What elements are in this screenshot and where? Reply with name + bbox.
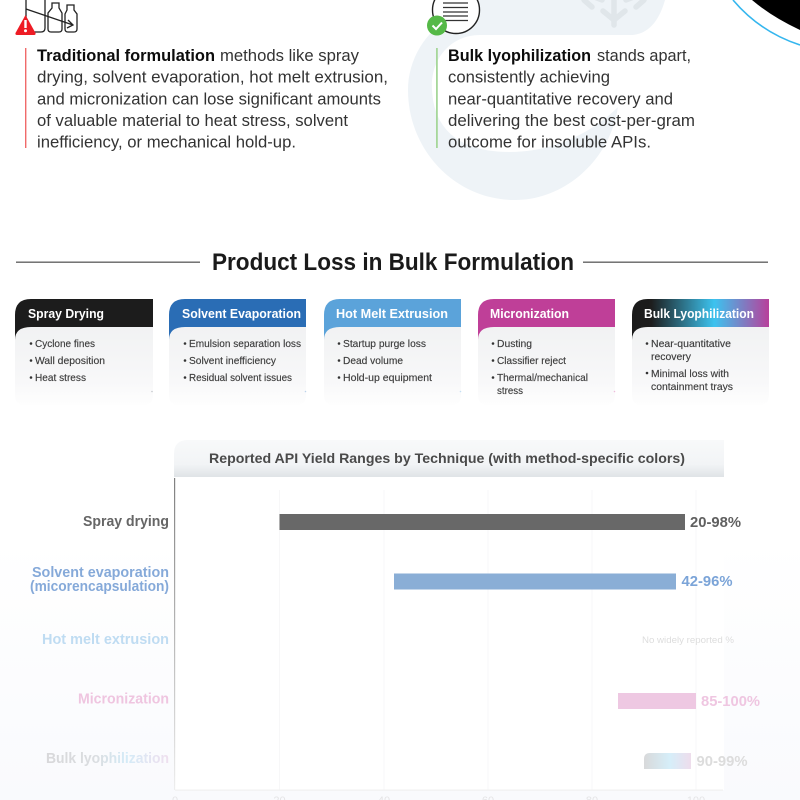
text block: traditional formulation: methods like spray (220, 47, 360, 65)
text block: bulk lyophilization: outcome for insoluble APIs. (448, 134, 651, 152)
icon: document with check (427, 0, 480, 36)
bar: solvent evaporation: 42-96% (682, 573, 732, 590)
bar: bulk lyophilization: Bulk lyophilization (46, 751, 169, 767)
panel: micronization: Classifier reject (497, 355, 566, 367)
panel: hot melt extrusion: Hot Melt Extrusion (336, 306, 448, 321)
icon: bottles with warning (15, 0, 77, 35)
text block: traditional formulation: and micronization can lose significant amounts (37, 90, 381, 108)
heading: product loss: Product Loss in Bulk Formulation (212, 249, 574, 276)
panel: hot melt extrusion: Startup purge loss (343, 338, 426, 350)
bar: bulk lyophilization: 90-99% (696, 753, 748, 770)
panel: spray drying: Spray Drying (28, 306, 104, 321)
text block: bulk lyophilization (436, 47, 695, 152)
panel: spray drying: Cyclone fines (35, 338, 95, 350)
panel: micronization: stress (497, 385, 523, 397)
panel: bulk lyophilization: recovery (651, 351, 692, 363)
panel: bulk lyophilization: Near-quantitative (651, 338, 731, 350)
text block: bulk lyophilization: consistently achieving (448, 69, 610, 87)
text block: traditional formulation: of valuable material to heat stress, solvent (37, 112, 348, 130)
background blob (408, 0, 665, 200)
panel: bulk lyophilization: containment trays (651, 381, 733, 393)
chart title: Reported API Yield Ranges by Technique (with method-specific colors) (209, 450, 685, 466)
icon: snowflake (584, 0, 644, 25)
bar: spray drying: Spray drying (83, 514, 169, 530)
bar: micronization: 85-100% (701, 693, 760, 710)
panel: micronization: Micronization (490, 306, 569, 321)
text block: traditional formulation: drying, solvent evaporation, hot melt extrusion, (37, 69, 388, 87)
chart: reported API yield ranges (30, 440, 760, 800)
panel: micronization: Thermal/mechanical (497, 372, 588, 384)
panel: bulk lyophilization: Bulk Lyophilization (644, 306, 754, 321)
panel: bulk lyophilization (632, 299, 769, 405)
panel: micronization: Dusting (497, 338, 532, 350)
bar: hot melt extrusion: Hot melt extrusion (42, 632, 169, 648)
panel: solvent evaporation: Residual solvent issues (189, 372, 292, 384)
panel: hot melt extrusion: Dead volume (343, 355, 403, 367)
panel: micronization (478, 299, 615, 405)
panel: solvent evaporation (169, 299, 306, 405)
panel: spray drying: Heat stress (35, 372, 86, 384)
text block: bulk lyophilization: stands apart, (597, 47, 691, 65)
text block: bulk lyophilization: Bulk lyophilization (448, 47, 591, 65)
text block: traditional formulation: inefficiency, or mechanical hold-up. (37, 134, 296, 152)
panel: hot melt extrusion: Hold-up equipment (343, 372, 432, 384)
bar: spray drying (83, 514, 741, 531)
x axis tick labels (172, 795, 705, 800)
top-right circle accent (733, 0, 800, 45)
text block: traditional formulation: Traditional formulation (37, 47, 215, 65)
chart title (174, 440, 724, 477)
bar: micronization: Micronization (78, 692, 169, 708)
text block: traditional formulation (25, 47, 388, 152)
panel: bulk lyophilization: Minimal loss with (651, 368, 729, 380)
bar: micronization (78, 692, 760, 710)
bar: bulk lyophilization (46, 751, 748, 770)
panel: solvent evaporation: Solvent inefficiency (189, 355, 277, 367)
bar: hot melt extrusion (42, 632, 734, 648)
panel: hot melt extrusion (324, 299, 461, 405)
text block: bulk lyophilization: delivering the best cost-per-gram (448, 112, 695, 130)
panel: solvent evaporation: Emulsion separation loss (189, 338, 301, 350)
bar: solvent evaporation: (micorencapsulation) (30, 579, 169, 595)
text block: bulk lyophilization: near-quantitative recovery and (448, 90, 673, 108)
bar: spray drying: 20-98% (690, 514, 741, 531)
panel: spray drying: Wall deposition (35, 355, 105, 367)
panel: solvent evaporation: Solvent Evaporation (182, 306, 301, 321)
bar: solvent evaporation (30, 565, 732, 595)
panel: spray drying (15, 299, 153, 405)
bar: hot melt extrusion: No widely reported % (642, 635, 734, 645)
bar: solvent evaporation: Solvent evaporation (32, 565, 169, 581)
